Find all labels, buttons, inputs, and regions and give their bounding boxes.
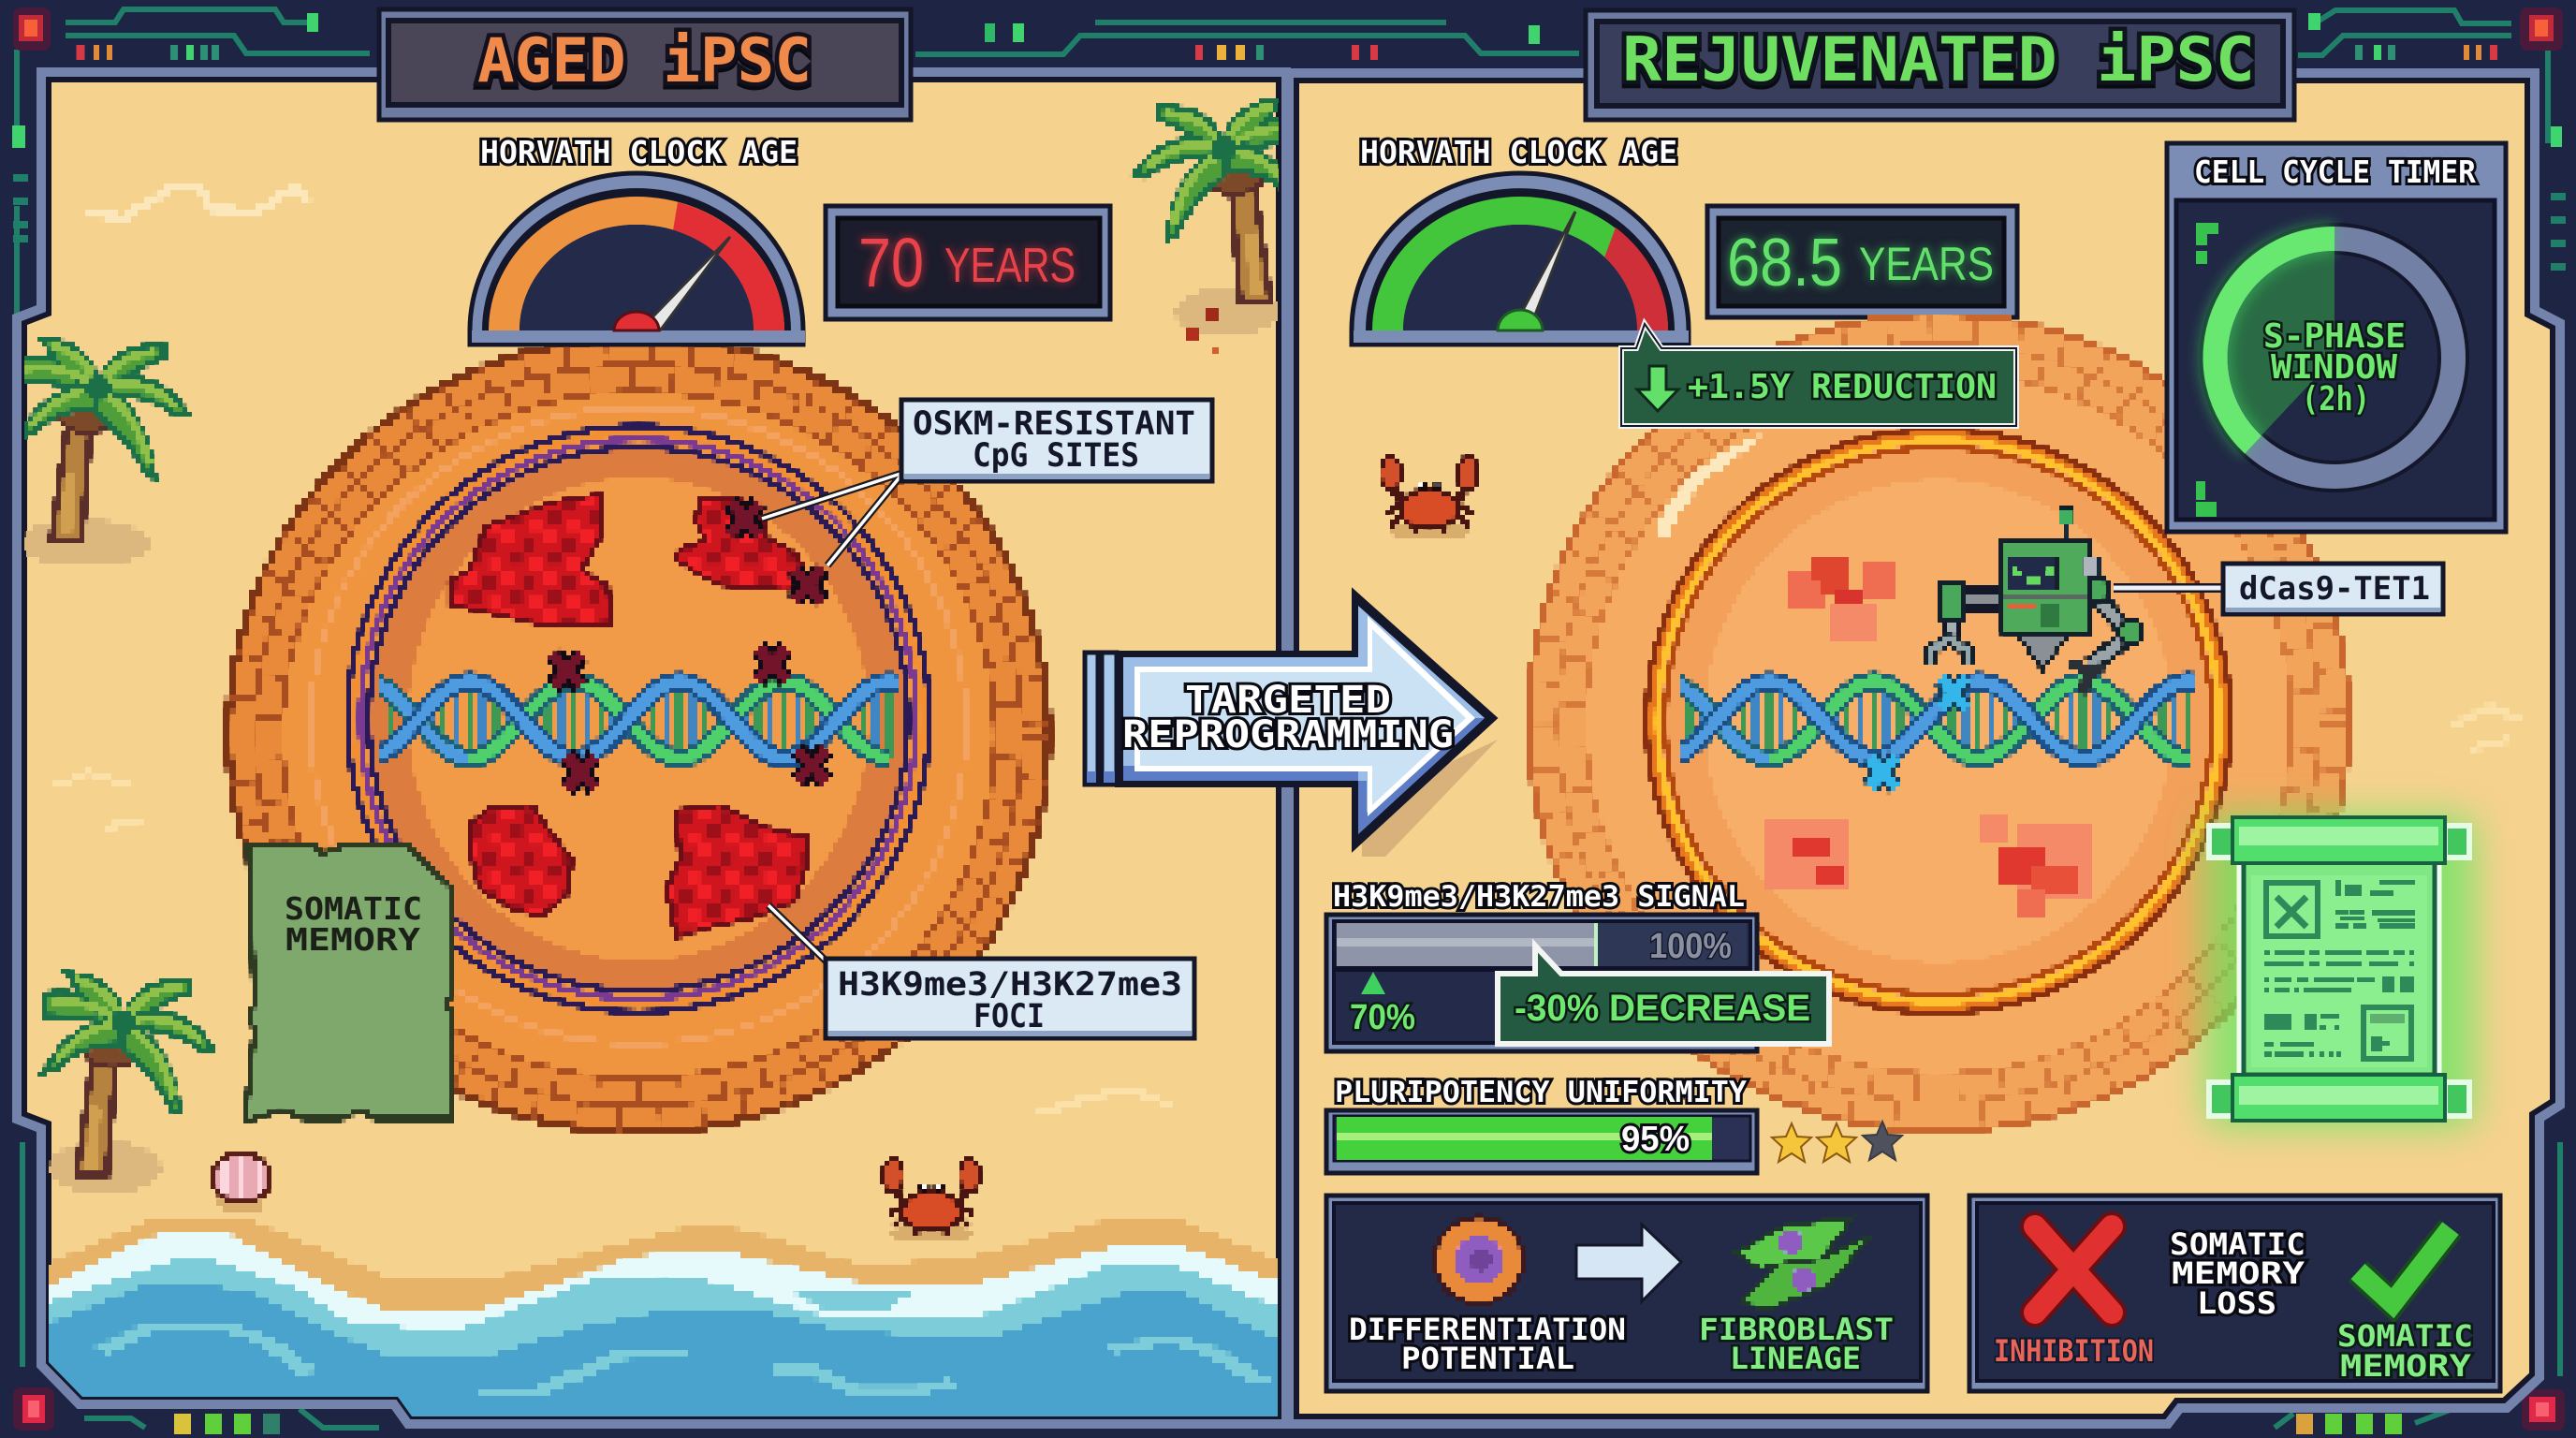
panel: somatic memory loss: INHIBITION xyxy=(1994,1333,2154,1369)
bar chart: histone signal: 100% xyxy=(1649,927,1732,966)
corner LED: top left xyxy=(13,7,51,51)
cell membrane xyxy=(228,338,1048,1132)
icon: fibroblast leaves xyxy=(1736,1217,1870,1311)
DNA helix: rejuvenated xyxy=(1608,682,2291,758)
panel: somatic memory loss: SOMATIC xyxy=(2170,1226,2305,1262)
bar chart: histone signal xyxy=(1326,915,1757,1051)
icon: stem cell xyxy=(1435,1217,1523,1303)
label: H3K9me3/H3K27me3 foci: FOCI xyxy=(973,998,1045,1035)
beach scenery: right xyxy=(2452,707,2523,749)
somatic memory scroll: aged xyxy=(245,846,453,1122)
panel: aged iPSC beach background xyxy=(24,80,1279,1416)
panel: cell cycle timer xyxy=(2167,143,2506,532)
label: dCas9-TET1 xyxy=(2223,564,2443,614)
marker triangle xyxy=(1361,972,1385,994)
corner LED: bottom left xyxy=(13,1387,54,1431)
panel: cell cycle timer: CELL CYCLE TIMER xyxy=(2194,154,2476,190)
panel: cell cycle timer: WINDOW xyxy=(2271,348,2397,387)
panel: somatic memory loss: SOMATIC xyxy=(2337,1318,2473,1354)
progress bar: 95% xyxy=(1326,1110,1757,1173)
heterochromatin clumps: H3K9me3/H3K27me3 foci xyxy=(450,494,808,937)
left cell xyxy=(228,338,1048,1132)
panel: differentiation potential: POTENTIAL xyxy=(1401,1341,1574,1376)
arrow: targeted reprogramming xyxy=(1085,594,1498,857)
panel: differentiation potential: FIBROBLAST xyxy=(1699,1312,1894,1347)
water and waves xyxy=(49,1219,1279,1423)
somatic memory scroll: aged: MEMORY xyxy=(285,921,420,958)
callout: -30% decrease: -30% DECREASE xyxy=(1515,988,1810,1029)
label: OSKM-resistant CpG sites: OSKM-RESISTANT xyxy=(913,405,1195,443)
digital readout: 70 years: 70 xyxy=(858,224,924,301)
title plate: rejuvenated iPSC: REJUVENATED iPSC xyxy=(1622,25,2255,95)
digital readout: 68.5 years xyxy=(1707,206,2017,317)
title plate: rejuvenated iPSC xyxy=(1586,10,2294,120)
icon: crab right panel xyxy=(1381,457,1478,540)
beach scenery: left xyxy=(19,100,1303,1211)
cell membrane rejuvenated xyxy=(1529,315,2349,1131)
corner pixel marks xyxy=(2196,223,2218,517)
callout: +1.5Y reduction xyxy=(1621,324,2016,426)
digital readout: 70 years xyxy=(826,206,1110,319)
icon: down arrow xyxy=(1637,366,1678,411)
panel: differentiation potential: DIFFERENTIATION xyxy=(1349,1312,1626,1347)
arrow: targeted reprogramming: TARGETED xyxy=(1185,679,1391,722)
scroll end caps xyxy=(2209,826,2469,1116)
icon: green check xyxy=(2358,1228,2451,1303)
nucleus rejuvenated xyxy=(1647,429,2231,1013)
label: OSKM-resistant CpG sites xyxy=(901,400,1212,481)
label: dCas9-TET1: dCas9-TET1 xyxy=(2239,570,2430,608)
DNA helix: aged xyxy=(309,682,992,758)
digital readout: 70 years: YEARS xyxy=(944,239,1076,293)
panel: somatic memory loss: MEMORY xyxy=(2172,1255,2305,1291)
heading: H3K9me3/H3K27me3 signal: H3K9me3/H3K27me3 SIGNAL xyxy=(1333,880,1745,914)
panel: somatic memory loss xyxy=(1969,1196,2500,1391)
icon: glowing somatic memory scroll xyxy=(2204,814,2476,1128)
label: OSKM-resistant CpG sites: CpG SITES xyxy=(973,437,1139,475)
panel: rejuvenated iPSC beach background xyxy=(1296,81,2553,1416)
icon: pink seashell xyxy=(212,1153,271,1202)
title plate: aged iPSC xyxy=(379,9,911,120)
panel: cell cycle timer: (2h) xyxy=(2302,380,2370,418)
arrow: targeted reprogramming: REPROGRAMMING xyxy=(1122,713,1454,756)
nucleus xyxy=(347,426,929,1012)
panel: cell cycle timer: S-PHASE xyxy=(2263,317,2406,356)
panel: somatic memory loss: LOSS xyxy=(2197,1285,2276,1321)
demethylated CpG marks xyxy=(1869,678,1967,787)
scroll document details xyxy=(2263,880,2415,1062)
digital readout: 68.5 years: 68.5 xyxy=(1727,226,1842,301)
corner LED: bottom right xyxy=(2522,1389,2565,1431)
icon: dCas9-TET1 robot xyxy=(1931,507,2143,695)
title plate: aged iPSC: AGED iPSC xyxy=(477,26,812,96)
heading: Horvath clock age left: HORVATH CLOCK AGE xyxy=(480,134,798,170)
callout: -30% decrease xyxy=(1498,946,1829,1044)
icon: red X xyxy=(2035,1226,2112,1313)
progress bar: 95%: 95% xyxy=(1621,1120,1690,1159)
bar chart: histone signal: 70% xyxy=(1350,998,1415,1037)
CpG site marks xyxy=(553,503,826,788)
icon: palm trees left panel xyxy=(19,100,1303,1175)
heading: pluripotency uniformity: PLURIPOTENCY UNIFORMITY xyxy=(1335,1076,1747,1109)
faded chromatin foci xyxy=(1766,557,2092,916)
callout: +1.5Y reduction: +1.5Y REDUCTION xyxy=(1688,368,1997,406)
icon: arrow xyxy=(1576,1225,1681,1301)
timer ring xyxy=(2215,239,2453,477)
rating stars xyxy=(1772,1122,1902,1162)
corner LED: top right xyxy=(2520,7,2563,51)
label: H3K9me3/H3K27me3 foci: H3K9me3/H3K27me3 xyxy=(838,966,1182,1004)
panel: somatic memory loss: MEMORY xyxy=(2340,1348,2472,1384)
icon: crab left panel xyxy=(883,1159,980,1242)
leader lines: OSKM label to CpG sites xyxy=(762,473,903,962)
heading: Horvath clock age right: HORVATH CLOCK AGE xyxy=(1360,134,1677,170)
label: H3K9me3/H3K27me3 foci xyxy=(826,959,1194,1038)
somatic memory scroll: aged: SOMATIC xyxy=(285,890,422,927)
gauge: rejuvenated clock xyxy=(1352,173,1689,345)
digital readout: 68.5 years: YEARS xyxy=(1859,238,1994,290)
leader line: dCas9-TET1 xyxy=(2114,583,2223,593)
gauge: aged clock xyxy=(470,173,805,345)
panel: differentiation potential xyxy=(1326,1196,1927,1391)
panel: differentiation potential: LINEAGE xyxy=(1730,1341,1861,1376)
right cell xyxy=(1529,315,2349,1131)
